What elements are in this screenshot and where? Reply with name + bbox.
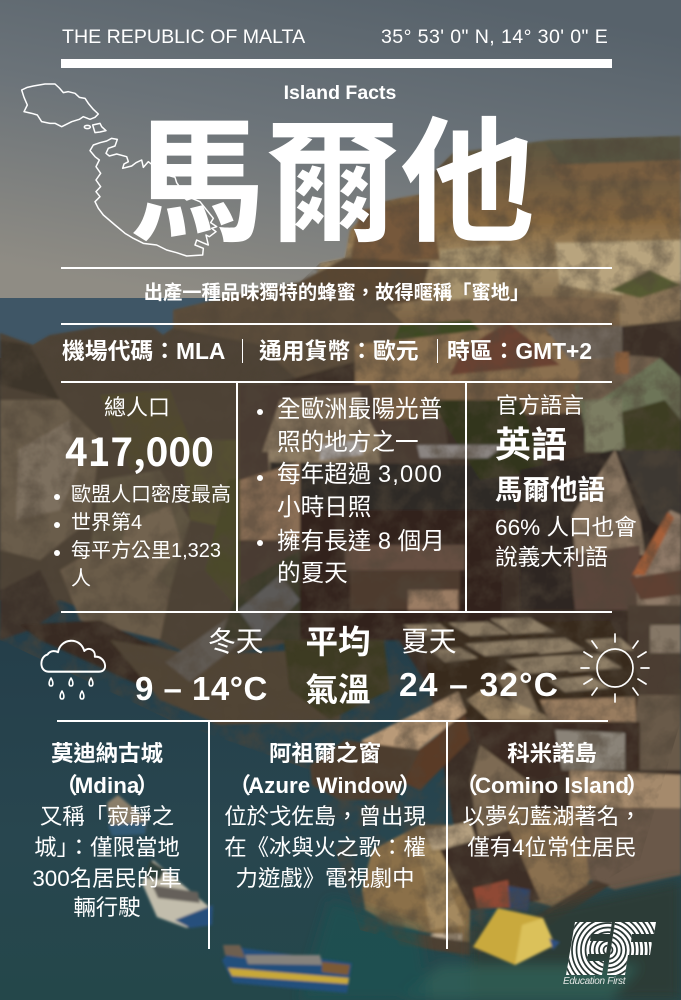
- population bullets: 世界第4: [71, 512, 142, 534]
- header bar: [61, 59, 612, 68]
- logo: EF Education First: [563, 922, 656, 987]
- boat 1: [222, 947, 352, 993]
- panel: languages: 66% 人口也會: [495, 515, 637, 540]
- beach bar decks: [420, 620, 640, 720]
- central houses: [240, 345, 470, 640]
- panel: languages: 說義大利語: [495, 545, 608, 570]
- panel: Comino Island: 科米諾島: [507, 741, 597, 766]
- winter label: 冬天: [208, 626, 264, 657]
- lower-right houses: [520, 450, 681, 610]
- column divider: [446, 721, 448, 949]
- panel: Mdina: 300名居民的車: [32, 866, 182, 891]
- temperature label: 氣溫: [305, 672, 370, 708]
- panel: Azure Window: 位於戈佐島，曾出現: [224, 804, 426, 829]
- panel: languages: [495, 393, 637, 570]
- main title: 馬爾他: [130, 73, 535, 269]
- population bullets: 人: [71, 568, 91, 590]
- panel: Mdina: 莫迪納古城: [51, 741, 163, 766]
- panel: languages: 馬爾他語: [495, 474, 605, 505]
- lower town: [470, 720, 640, 790]
- panel: Comino Island: 以夢幻藍湖著名，: [462, 804, 642, 829]
- right green house: [575, 358, 681, 450]
- panel: Comino Island: [455, 741, 649, 860]
- panel: sunshine: 擁有長達 8 個月: [277, 529, 445, 555]
- header: coordinates: 35° 53' 0" N, 14° 30' 0" E: [381, 26, 608, 48]
- panel: Azure Window: 在《冰與火之歌：權: [224, 835, 426, 860]
- separators: [242, 339, 438, 363]
- quick facts: currency: 通用貨幣：歐元: [259, 338, 419, 364]
- quick facts: time zone: 時區：GMT+2: [447, 338, 592, 364]
- header: country name: THE REPUBLIC OF MALTA: [62, 26, 305, 48]
- population number: 417,000: [65, 422, 214, 478]
- panel: languages: 英語: [495, 424, 567, 465]
- right building: [628, 605, 681, 695]
- population bullets: [54, 484, 231, 590]
- panel: sunshine: 全歐洲最陽光普: [277, 397, 442, 423]
- icon: rain cloud: [40, 640, 106, 700]
- panel: Comino Island: （Comino Island）: [455, 773, 649, 798]
- cliffs: [300, 136, 681, 345]
- panel: population: [54, 395, 231, 590]
- column divider: [465, 382, 467, 611]
- column divider: [208, 721, 210, 949]
- panel: Mdina: 又稱「寂靜之: [40, 804, 174, 829]
- yellow inflatable: [473, 908, 555, 965]
- divider: [61, 381, 612, 383]
- palm: [622, 400, 681, 450]
- panel: Azure Window: （Azure Window）: [229, 773, 421, 798]
- subtitle: Island Facts: [284, 82, 396, 104]
- panel: sunshine: 照的地方之一: [277, 430, 419, 456]
- boat 2: [142, 860, 213, 928]
- panel: sunshine: 每年超過 3,000: [277, 462, 443, 488]
- boat 3: [107, 795, 147, 835]
- column divider: [236, 382, 238, 611]
- quick facts: airport code: 機場代碼：MLA: [62, 338, 225, 364]
- divider: [57, 720, 608, 722]
- panel: Mdina: （Mdina）: [55, 773, 159, 798]
- railings: [540, 697, 636, 722]
- panel: sunshine: 的夏天: [277, 561, 348, 587]
- town base: [280, 320, 681, 860]
- population bullets: 每平方公里1,323: [71, 540, 221, 562]
- logo: EF Education First: Education First: [563, 976, 625, 987]
- divider: [61, 267, 612, 269]
- central bottom rocks: [362, 825, 470, 945]
- icon: sun: [580, 633, 650, 703]
- panel: sunshine: [257, 396, 445, 587]
- average label: 平均: [305, 624, 370, 660]
- map of Malta outline: [21, 83, 218, 257]
- summer label: 夏天: [401, 626, 457, 657]
- population bullets: 歐盟人口密度最高: [71, 484, 231, 506]
- panel: Mdina: 城」：僅限當地: [34, 835, 180, 860]
- panel: Azure Window: [224, 741, 426, 891]
- tagline: 出產一種品味獨特的蜂蜜，故得暱稱「蜜地」: [144, 283, 529, 304]
- panel: Mdina: 輛行駛: [73, 895, 141, 920]
- panel: Mdina: [32, 741, 182, 920]
- panel: sunshine: 小時日照: [277, 495, 371, 521]
- divider: [61, 611, 612, 613]
- population label: 總人口: [104, 395, 170, 420]
- summer temperature: 24 – 32°C: [399, 667, 559, 704]
- panel: Azure Window: 力遊戲》電視劇中: [235, 866, 415, 891]
- divider: [61, 323, 612, 325]
- left rocky hill: [0, 327, 300, 660]
- panel: Comino Island: 僅有4位常住居民: [467, 835, 637, 860]
- winter temperature: 9 – 14°C: [135, 670, 268, 707]
- panel: Azure Window: 阿祖爾之窗: [269, 741, 381, 766]
- panel: languages: 官方語言: [496, 393, 584, 418]
